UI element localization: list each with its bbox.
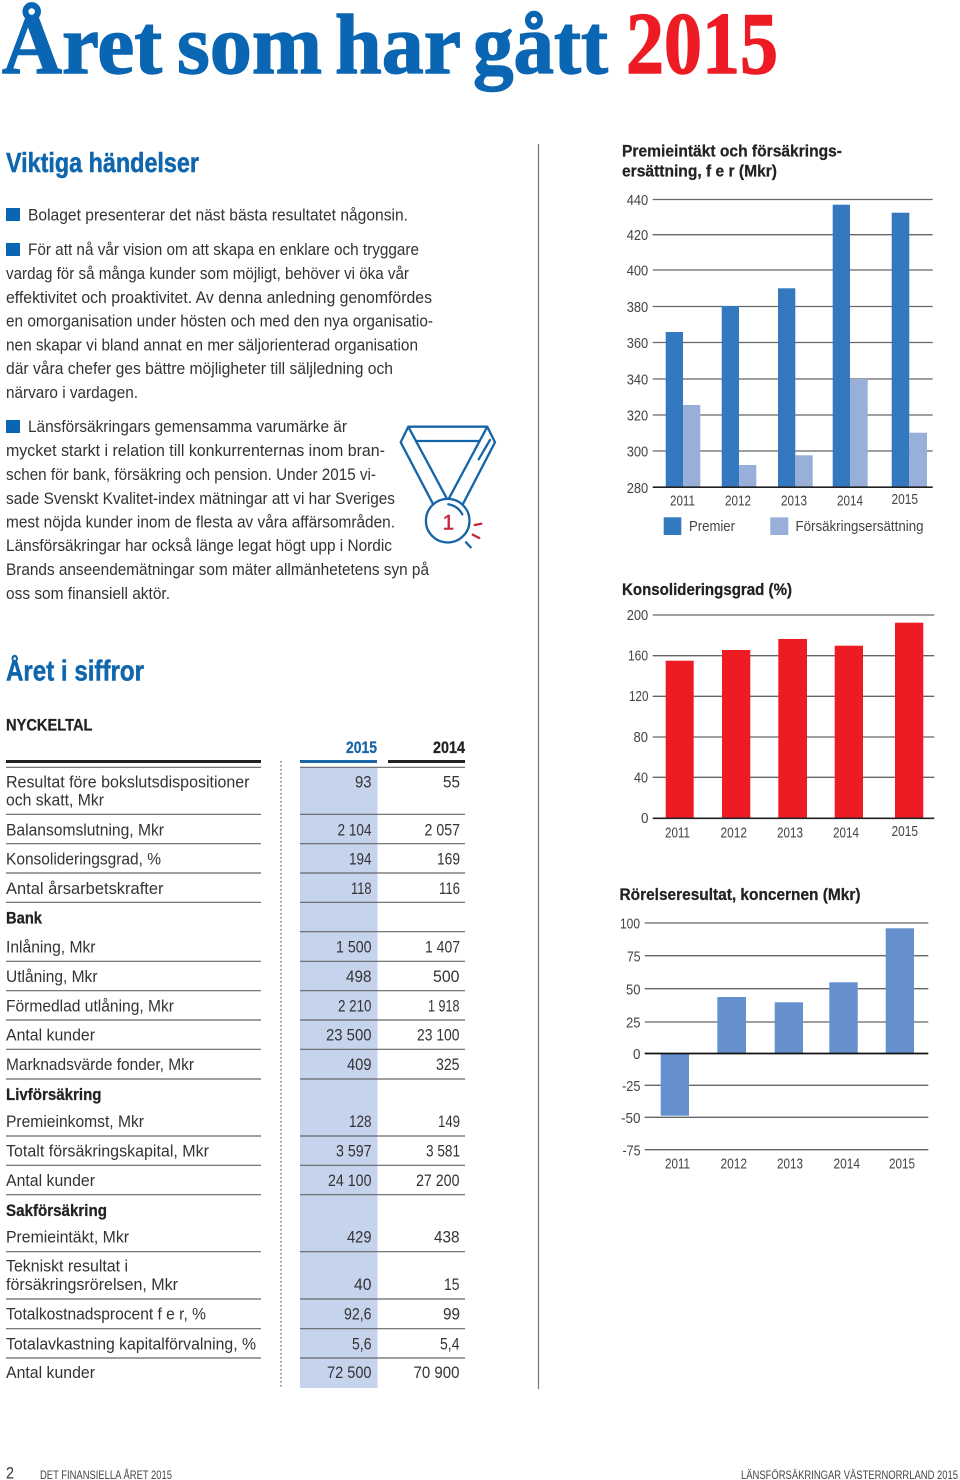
y axis labels: 340 — [627, 372, 648, 388]
y axis labels: 440 — [627, 193, 648, 209]
row: Resultat före bokslutsdispositioner: Resultat före bokslutsdispositioner — [6, 774, 250, 792]
column heading: 2015: 2015 — [346, 739, 377, 757]
row: Totalt försäkringskapital: 3 597 — [336, 1143, 372, 1161]
x axis labels: 2012 — [720, 1156, 747, 1172]
x axis labels: 2012 — [725, 494, 751, 510]
x axis labels — [665, 1156, 915, 1172]
row: Tekniskt resultat: Tekniskt resultat i — [6, 1258, 128, 1276]
row: Totalavkastning kapitalförvaltning: 5,4 — [440, 1335, 460, 1353]
x axis labels: 2015 — [889, 1156, 915, 1172]
table heading: NYCKELTAL: NYCKELTAL — [6, 717, 92, 735]
panel: bullet 3 — [6, 418, 430, 603]
footer — [6, 1464, 958, 1480]
y axis labels — [620, 916, 640, 1160]
y axis labels: 280 — [627, 481, 648, 497]
panel: bullet 3: sade Svenskt Kvalitet-index mätningar att vi har Sveriges — [6, 490, 395, 508]
y axis labels: 380 — [627, 300, 648, 316]
row: Antal kunder (liv) — [6, 1172, 460, 1190]
row: Totalavkastning kapitalförvaltning: 5,6 — [352, 1335, 372, 1353]
x axis labels: 2015 — [892, 824, 918, 840]
row: Antal kunder (bank) — [6, 1027, 460, 1045]
y axis labels: 160 — [628, 648, 648, 664]
x axis labels: 2012 — [720, 825, 747, 841]
row: Antal kunder (sak): 72 500 — [327, 1364, 372, 1382]
y axis labels: -25 — [622, 1079, 640, 1095]
x axis labels: 2014 — [833, 825, 859, 841]
row: Totalt försäkringskapital: 3 581 — [426, 1143, 460, 1161]
panel: bullet 3: mest nöjda kunder inom de flesta av våra affärsområden. — [6, 514, 395, 532]
row: Premieinkomst: 128 — [349, 1113, 372, 1131]
row: Premieintäkt: Premieintäkt, Mkr — [6, 1229, 129, 1247]
icon: medal: 1 — [442, 512, 454, 534]
y axis labels: -75 — [622, 1144, 640, 1160]
row: Utlåning: 500 — [433, 968, 460, 986]
row: Inlåning: 1 407 — [425, 939, 460, 957]
panel: bullet 2 — [6, 241, 433, 402]
x axis labels: 2013 — [777, 825, 803, 841]
row: Inlåning — [6, 939, 460, 957]
row: Resultat före bokslutsdispositioner: 93 — [355, 774, 372, 792]
y axis labels: 0 — [641, 811, 648, 827]
x axis labels: 2014 — [837, 494, 863, 510]
row: Antal kunder (sak) — [6, 1364, 460, 1382]
row: Antal årsarbetskrafter — [6, 880, 460, 898]
y axis labels: 75 — [627, 950, 640, 966]
subheading: Livförsäkring: Livförsäkring — [6, 1086, 102, 1104]
row: Balansomslutning: 2 057 — [424, 821, 460, 839]
row: Marknadsvärde fonder: 325 — [436, 1056, 460, 1074]
row: Förmedlad utlåning: 1 918 — [428, 997, 460, 1015]
row: Antal kunder (liv): Antal kunder — [6, 1172, 95, 1190]
x axis labels: 2015 — [892, 492, 918, 508]
bars: rörelseresultat — [661, 928, 914, 1116]
row: Antal kunder (sak): 70 900 — [414, 1364, 460, 1382]
y axis labels: -50 — [621, 1111, 640, 1127]
y axis labels: 120 — [629, 689, 648, 705]
y axis labels: 200 — [627, 608, 648, 624]
legend — [664, 517, 924, 535]
panel: bullet 3: Länsförsäkringars gemensamma varumärke är — [28, 418, 347, 436]
y axis labels — [627, 193, 648, 497]
heading: Året i siffror: Året i siffror — [6, 655, 144, 688]
y axis labels: 80 — [634, 730, 648, 746]
row: Konsolideringsgrad: 169 — [437, 851, 460, 869]
row: Marknadsvärde fonder — [6, 1056, 460, 1074]
subheading: Bank: Bank — [6, 909, 43, 927]
row: Balansomslutning: 2 104 — [338, 821, 372, 839]
row: Förmedlad utlåning: Förmedlad utlåning, Mkr — [6, 997, 174, 1015]
legend: Försäkringsersättning — [796, 519, 924, 535]
row: Antal årsarbetskrafter: 116 — [439, 880, 460, 898]
row: Tekniskt resultat — [6, 1258, 460, 1294]
row: Resultat före bokslutsdispositioner — [6, 774, 460, 809]
y axis labels: 40 — [634, 770, 648, 786]
row: Konsolideringsgrad — [6, 851, 460, 869]
row: Totalt försäkringskapital: Totalt försäkringskapital, Mkr — [6, 1143, 209, 1161]
row: Resultat före bokslutsdispositioner: 55 — [443, 774, 460, 792]
row: Antal kunder (liv): 27 200 — [416, 1172, 460, 1190]
row: Tekniskt resultat: 15 — [444, 1276, 460, 1294]
row: Totalkostnadsprocent: Totalkostnadsprocent f e r, % — [6, 1305, 206, 1323]
row: Förmedlad utlåning — [6, 997, 460, 1015]
row: Totalkostnadsprocent: 99 — [443, 1305, 460, 1323]
row: Resultat före bokslutsdispositioner: och skatt, Mkr — [6, 791, 104, 809]
y axis labels: 360 — [627, 336, 648, 352]
row: Antal kunder (liv): 24 100 — [328, 1172, 372, 1190]
panel: bullet 2: där våra chefer ges bättre möjligheter till säljledning och — [6, 360, 393, 378]
title: som — [177, 0, 322, 92]
row: Antal kunder (bank): 23 100 — [417, 1027, 460, 1045]
panel: bullet 3: Brands anseendemätningar som mäter allmänhetetens syn på — [6, 561, 430, 579]
panel: bullet 3: oss som finansiell aktör. — [6, 585, 170, 603]
icon: medal — [401, 427, 495, 547]
chart title: ersättning, f e r (Mkr) — [622, 163, 777, 181]
x axis labels: 2011 — [670, 494, 695, 510]
x axis labels: 2013 — [781, 494, 807, 510]
row: Antal kunder (bank): 23 500 — [326, 1027, 372, 1045]
row: Marknadsvärde fonder: Marknadsvärde fonder, Mkr — [6, 1056, 194, 1074]
row: Förmedlad utlåning: 2 210 — [338, 997, 372, 1015]
x axis labels: 2011 — [665, 825, 690, 841]
row: Tekniskt resultat: försäkringsrörelsen, Mkr — [6, 1276, 178, 1294]
row: Konsolideringsgrad: 194 — [349, 851, 372, 869]
panel: bullet 2: en omorganisation under hösten och med den nya organisatio- — [6, 313, 433, 331]
chart: Premieintäkt och försäkringsersättning — [622, 143, 933, 535]
bars: Försäkringsersättning — [683, 379, 927, 487]
title: gått — [473, 0, 608, 92]
panel: bullet 3: mycket starkt i relation till konkurrenternas inom bran- — [6, 442, 385, 460]
panel: bullet 3: Länsförsäkringar har också länge legat högt upp i Nordic — [6, 537, 392, 555]
x axis labels: 2013 — [777, 1156, 803, 1172]
y axis labels: 100 — [620, 916, 640, 932]
row: Totalkostnadsprocent — [6, 1305, 460, 1323]
panel: bullet 1: Bolaget presenterar det näst bästa resultatet någonsin. — [28, 207, 408, 225]
row: Totalavkastning kapitalförvaltning: Totalavkastning kapitalförvalning, % — [6, 1335, 256, 1353]
row: Inlåning: Inlåning, Mkr — [6, 939, 96, 957]
chart: Konsolideringsgrad — [622, 581, 934, 841]
panel: bullet 2: vardag för så många kunder som möjligt, behöver vi öka vår — [6, 265, 409, 283]
row: Premieintäkt: 438 — [434, 1229, 460, 1247]
chart title: Rörelseresultat, koncernen (Mkr) — [620, 886, 860, 904]
row: Premieintäkt: 429 — [347, 1229, 372, 1247]
chart title: Premieintäkt och försäkrings- — [622, 143, 842, 161]
bars: konsolideringsgrad — [666, 623, 923, 818]
row: Premieinkomst — [6, 1113, 460, 1131]
row: Premieintäkt — [6, 1229, 460, 1247]
x axis labels: 2014 — [834, 1156, 860, 1172]
row: Totalt försäkringskapital — [6, 1143, 460, 1161]
y axis labels: 300 — [627, 444, 648, 460]
x axis labels — [670, 492, 918, 510]
chart title: Konsolideringsgrad (%) — [622, 581, 792, 599]
panel: bullet 3: schen för bank, försäkring och pension. Under 2015 vi- — [6, 466, 376, 484]
row: Konsolideringsgrad: Konsolideringsgrad, % — [6, 851, 161, 869]
row: Antal årsarbetskrafter: 118 — [351, 880, 372, 898]
x axis labels — [665, 824, 918, 841]
panel: bullet 2: närvaro i vardagen. — [6, 384, 138, 402]
legend: Premier — [689, 519, 735, 535]
y axis labels: 420 — [627, 228, 648, 244]
y axis labels: 25 — [626, 1016, 640, 1032]
column heading: 2014: 2014 — [433, 739, 466, 757]
row: Totalavkastning kapitalförvaltning — [6, 1335, 460, 1353]
heading: Viktiga händelser: Viktiga händelser — [6, 147, 199, 178]
row: Totalkostnadsprocent: 92,6 — [344, 1305, 372, 1323]
row: Balansomslutning — [6, 821, 460, 839]
y axis labels: 50 — [626, 982, 640, 998]
title — [2, 0, 778, 93]
title: Året — [2, 0, 162, 92]
y axis labels — [627, 608, 648, 827]
row: Marknadsvärde fonder: 409 — [347, 1056, 372, 1074]
chart: Rörelseresultat — [620, 886, 928, 1172]
title: har — [335, 0, 461, 92]
y axis labels: 400 — [627, 264, 648, 280]
row: Utlåning: Utlåning, Mkr — [6, 968, 98, 986]
bars: Premier — [666, 205, 909, 487]
chart title — [622, 143, 842, 181]
row: Tekniskt resultat: 40 — [354, 1276, 372, 1294]
row: Premieinkomst: 149 — [438, 1113, 460, 1131]
panel: bullet 2: För att nå vår vision om att skapa en enklare och tryggare — [28, 241, 419, 259]
row: Utlåning — [6, 968, 460, 986]
panel: bullet 2: nen skapar vi bland annat en mer säljorienterad organisation — [6, 337, 418, 355]
row: Utlåning: 498 — [346, 968, 372, 986]
row: Balansomslutning: Balansomslutning, Mkr — [6, 821, 164, 839]
table: nyckeltal — [6, 717, 466, 1389]
x axis labels: 2011 — [665, 1156, 690, 1172]
row: Antal årsarbetskrafter: Antal årsarbetskrafter — [6, 880, 164, 898]
panel: bullet 2: effektivitet och proaktivitet. Av denna anledning genomfördes — [6, 289, 432, 307]
row: Premieinkomst: Premieinkomst, Mkr — [6, 1113, 144, 1131]
y axis labels: 320 — [627, 408, 648, 424]
row: Antal kunder (bank): Antal kunder — [6, 1027, 95, 1045]
row: Antal kunder (sak): Antal kunder — [6, 1364, 95, 1382]
y axis labels: 0 — [633, 1047, 640, 1063]
row: Inlåning: 1 500 — [336, 939, 372, 957]
subheading: Sakförsäkring: Sakförsäkring — [6, 1202, 107, 1220]
